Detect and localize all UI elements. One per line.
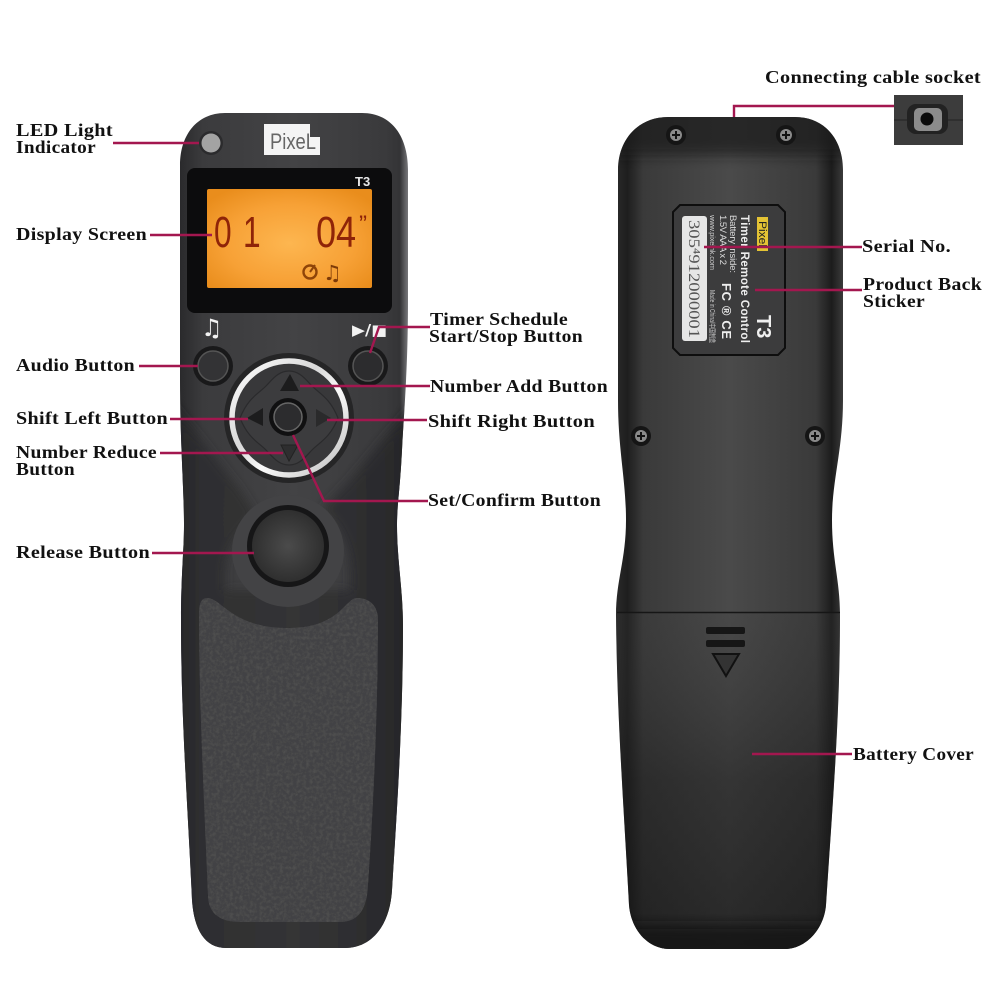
Pixel logo — [264, 124, 320, 155]
label: Shift Right Button: Shift Right Button — [428, 411, 595, 431]
label: LED Light Indicator: LED Light — [16, 120, 113, 140]
audio button — [193, 346, 233, 386]
label: Serial No.: Serial No. — [862, 236, 951, 256]
label: Number Reduce Button — [16, 442, 157, 479]
front lower shading — [180, 404, 405, 948]
timer and audio icons: ♫ — [323, 261, 342, 285]
sticker title: Timer Remote Control — [738, 215, 750, 343]
product back sticker — [673, 205, 785, 355]
back body — [616, 117, 843, 949]
screw heads — [635, 129, 821, 442]
LED light — [199, 131, 223, 155]
display screen — [187, 168, 392, 313]
label: Timer Schedule Start/Stop Button — [429, 309, 583, 346]
label: Number Add Button: Number Add Button — [430, 376, 608, 396]
label: LED Light Indicator — [16, 120, 113, 157]
label: Product Back Sticker — [863, 274, 982, 311]
serial strip: 305⁴912000001 — [685, 220, 702, 338]
website text: www.pixelhk.com — [708, 214, 717, 270]
label: Product Back Sticker: Sticker — [863, 291, 925, 311]
Pixel logo: PixeL — [270, 129, 316, 154]
origin text: Made in China/中国制造 — [708, 290, 717, 343]
battery text: Battery inside: — [727, 215, 738, 273]
label: Number Reduce Button: Button — [16, 459, 75, 479]
leather grip — [199, 598, 378, 922]
battery cover slots — [706, 627, 745, 647]
cover seam — [617, 612, 840, 614]
release button — [232, 495, 344, 607]
label: LED Light Indicator: Indicator — [16, 137, 96, 157]
timer button — [348, 346, 388, 386]
label: Battery Cover: Battery Cover — [853, 744, 974, 764]
top edge shade — [618, 117, 842, 161]
LCD digits: ” — [359, 211, 367, 238]
cross pad — [240, 371, 338, 465]
label: Set/Confirm Button: Set/Confirm Button — [428, 490, 601, 510]
certification marks: FC ® CE — [719, 283, 734, 339]
yellow logo: Pixel — [756, 221, 768, 247]
label: Number Reduce Button: Number Reduce — [16, 442, 157, 462]
set button — [269, 398, 307, 436]
sticker model: T3 — [752, 315, 774, 338]
front remote — [180, 113, 408, 948]
start stop icon: ▶/■ — [352, 321, 387, 339]
label: Display Screen: Display Screen — [16, 224, 147, 244]
cable socket photo — [894, 95, 963, 145]
voltage text: 1.5V AAA x 2 — [717, 215, 728, 265]
back remote — [616, 117, 843, 949]
label: Product Back Sticker: Product Back — [863, 274, 982, 294]
audio label icon: ♫ — [201, 314, 223, 342]
bottom edge shade — [632, 920, 822, 949]
label: Audio Button: Audio Button — [16, 355, 135, 375]
LCD digits — [214, 208, 367, 257]
label: Connecting cable socket: Connecting cable socket — [765, 67, 981, 87]
battery cover shade — [616, 612, 840, 949]
battery arrow — [713, 654, 739, 676]
direction pad — [224, 353, 354, 483]
label: Timer Schedule Start/Stop Button: Timer Schedule — [430, 309, 568, 329]
timer and audio icons — [304, 261, 342, 285]
label: Release Button: Release Button — [16, 542, 150, 562]
screw slots — [637, 131, 819, 440]
LCD digits: 04 — [316, 208, 356, 257]
front body — [180, 113, 408, 948]
label: Shift Left Button: Shift Left Button — [16, 408, 168, 428]
serial strip — [682, 216, 707, 341]
label: Timer Schedule Start/Stop Button: Start/Stop Button — [429, 326, 583, 346]
LCD digits: 1 — [243, 208, 261, 257]
display screen: T3 — [355, 174, 370, 189]
screws — [631, 125, 825, 446]
callout lines — [113, 106, 894, 754]
LCD digits: 0 — [214, 208, 232, 257]
